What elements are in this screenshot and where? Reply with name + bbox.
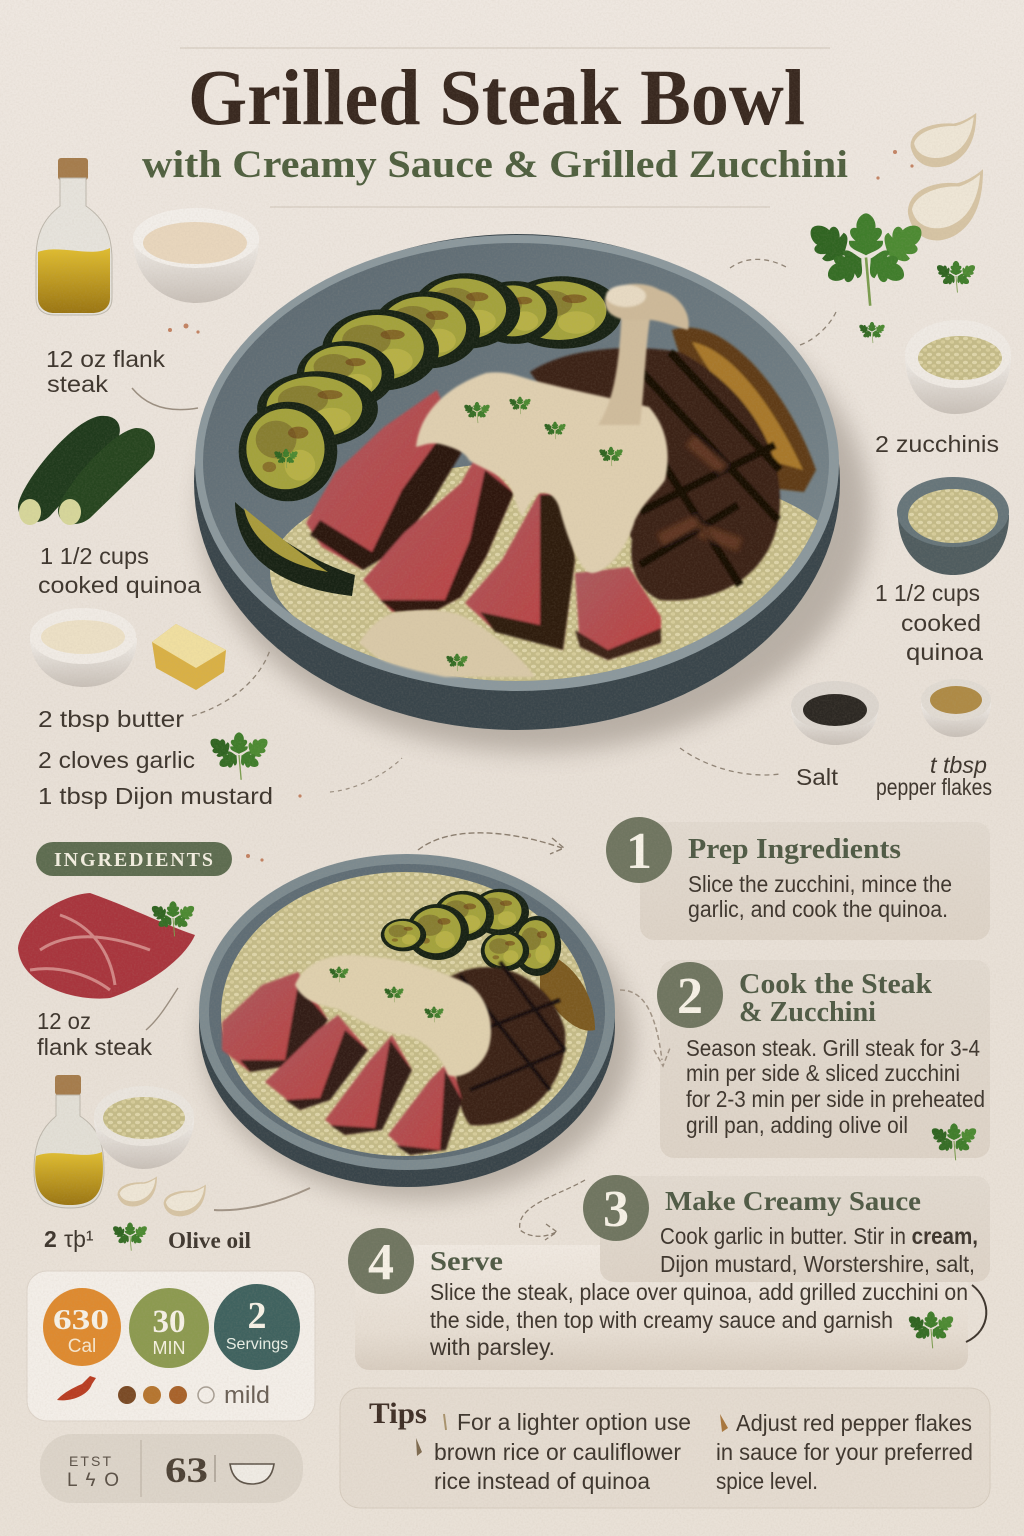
panel: lower info pill: 63 bbox=[165, 1450, 208, 1490]
label: olive oil: Olive oil bbox=[168, 1228, 251, 1253]
icon: cream bowl bbox=[30, 608, 137, 687]
label: flank steak: steak bbox=[47, 371, 109, 397]
panel: lower info pill: L ϟ O bbox=[67, 1470, 119, 1491]
panel: step 4: with parsley. bbox=[429, 1334, 555, 1360]
icon: olive oil bottle bbox=[36, 158, 112, 315]
parsley garnish bbox=[272, 397, 625, 671]
tip 2: Adjust red pepper flakes bbox=[736, 1410, 972, 1436]
lower bowl parsley bbox=[328, 966, 445, 1022]
icon: lower quinoa bowl bbox=[94, 1086, 194, 1169]
icon: quinoa bowl right bbox=[897, 477, 1009, 575]
label: quinoa right: quinoa bbox=[906, 639, 983, 665]
panel: step 2: Season steak. Grill steak for 3-4 bbox=[686, 1035, 980, 1061]
panel: step 1: garlic, and cook the quinoa. bbox=[688, 896, 948, 922]
icon: chili bbox=[57, 1376, 96, 1400]
icon: butter bbox=[152, 624, 226, 690]
lower bowl sauce bbox=[295, 955, 491, 1076]
panel: step 4 bbox=[348, 1228, 986, 1370]
label: flank steak lower: 12 oz bbox=[37, 1008, 91, 1034]
icon: parsley sprig bbox=[206, 732, 272, 780]
panel: tips: Tips bbox=[369, 1397, 427, 1430]
sliced steak bbox=[306, 390, 661, 660]
arrow: dashed to step one bbox=[418, 833, 564, 854]
icon: grain bowl top bbox=[905, 320, 1011, 414]
arrow: dashed to bowl bbox=[330, 758, 402, 792]
label: salt and pepper flakes: t tbsp bbox=[930, 752, 987, 778]
step number 1 bbox=[606, 817, 672, 883]
tip 1: rice instead of quinoa bbox=[434, 1468, 650, 1494]
icon: sprig near steak bbox=[148, 901, 198, 936]
label: salt and pepper flakes: pepper flakes bbox=[876, 774, 992, 800]
arrow: step 1 to step 2 bbox=[620, 990, 670, 1066]
arrow: step 3 to step 4 bbox=[520, 1180, 585, 1240]
tip 2: in sauce for your preferred bbox=[716, 1439, 973, 1465]
label: flank steak bbox=[46, 346, 166, 397]
lower bowl steak slices bbox=[222, 962, 565, 1155]
label: salt and pepper flakes: Salt bbox=[796, 764, 839, 790]
stat: servings: Servings bbox=[226, 1336, 288, 1353]
panel: step 2: for 2-3 min per side in preheated bbox=[686, 1086, 985, 1112]
label: olive oil: τþ¹ bbox=[64, 1226, 94, 1252]
panel: step 2: Cook the Steak bbox=[739, 968, 933, 1000]
panel: step 2: & Zucchini bbox=[739, 996, 876, 1028]
lower bowl zucchini bbox=[381, 889, 595, 1031]
arrow: dashed to butter bbox=[192, 650, 270, 716]
stat: minutes: 30 bbox=[152, 1304, 186, 1340]
label: butter garlic mustard: 2 tbsp butter bbox=[38, 706, 184, 732]
panel: step 4: Serve bbox=[430, 1246, 503, 1276]
zucchini slices bbox=[235, 273, 622, 596]
stat: servings: 2 bbox=[248, 1295, 266, 1337]
label: olive oil: 2 bbox=[44, 1226, 57, 1252]
label: quinoa left bbox=[38, 543, 201, 598]
panel: lower info pill: ETST bbox=[69, 1453, 111, 1469]
main grilled steak bowl bbox=[194, 234, 870, 752]
step number 3 bbox=[583, 1175, 649, 1241]
icon: parsley top right bbox=[801, 213, 978, 343]
label: quinoa left: 1 1/2 cups bbox=[40, 543, 149, 569]
step number 3: 3 bbox=[603, 1181, 629, 1238]
tip 2 bbox=[716, 1410, 973, 1494]
title: Grilled Steak Bowl bbox=[188, 55, 805, 142]
panel: step 4: the side, then top with creamy sauce and garnish bbox=[430, 1307, 893, 1333]
panel: step 3 bbox=[583, 1175, 990, 1282]
label: flank steak lower: flank steak bbox=[37, 1034, 153, 1060]
icon: spice bowl bbox=[921, 679, 991, 737]
label: zucchinis right: 2 zucchinis bbox=[875, 431, 999, 457]
panel: lower info pill bbox=[40, 1434, 303, 1503]
label: quinoa right bbox=[875, 580, 983, 665]
stat: calories: 630 bbox=[53, 1305, 109, 1336]
whole grilled steak bbox=[530, 328, 816, 600]
step number 4 bbox=[348, 1228, 414, 1294]
panel: step 4: Slice the steak, place over quinoa, add grilled zucchini on bbox=[430, 1279, 968, 1305]
stat: minutes: MIN bbox=[152, 1338, 186, 1358]
icon: sauce bowl bbox=[133, 208, 259, 303]
arrow: steak to lower bowl bbox=[146, 988, 178, 1030]
spice level dots bbox=[118, 1386, 214, 1404]
stat: calories: Cal bbox=[68, 1336, 96, 1357]
panel: step 3: Make Creamy Sauce bbox=[665, 1186, 921, 1216]
label: butter garlic mustard bbox=[38, 706, 273, 809]
subtitle: with Creamy Sauce & Grilled Zucchini bbox=[142, 143, 848, 186]
panel: step 3: Dijon mustard, Worstershire, salt, bbox=[660, 1251, 975, 1277]
icon: zucchinis bbox=[18, 416, 155, 525]
panel: nutrition stats bbox=[27, 1271, 315, 1421]
panel: step 3: Cook garlic in butter. Stir in cream, bbox=[660, 1223, 978, 1249]
label: quinoa right: cooked bbox=[901, 610, 981, 636]
icon: pepper bowl bbox=[791, 681, 879, 745]
spice specks bbox=[168, 150, 914, 862]
spice label: mild bbox=[224, 1382, 270, 1409]
label: quinoa left: cooked quinoa bbox=[38, 572, 201, 598]
label: flank steak lower bbox=[37, 1008, 153, 1060]
label: butter garlic mustard: 2 cloves garlic bbox=[38, 747, 195, 773]
label: butter garlic mustard: 1 tbsp Dijon mustard bbox=[38, 783, 273, 809]
label: quinoa right: 1 1/2 cups bbox=[875, 580, 980, 606]
ingredients heading pill: INGREDIENTS bbox=[54, 849, 213, 871]
panel: step 1: Prep Ingredients bbox=[688, 834, 901, 865]
panel: step 1 bbox=[606, 817, 990, 940]
icon: garlic cloves bbox=[908, 113, 983, 240]
step number 2: 2 bbox=[677, 968, 703, 1025]
tip 1: For a lighter option use bbox=[457, 1409, 691, 1435]
arrow: dashed to salt bbox=[680, 748, 780, 775]
panel: step 2: min per side & sliced zucchini bbox=[686, 1060, 960, 1086]
panel: step 2: grill pan, adding olive oil bbox=[686, 1112, 908, 1138]
ingredients heading pill bbox=[36, 842, 232, 876]
lower steak bowl bbox=[199, 854, 633, 1200]
icon: raw flank steak bbox=[18, 893, 195, 999]
tip 1: brown rice or cauliflower bbox=[434, 1439, 681, 1465]
step number 2 bbox=[657, 962, 723, 1028]
arrow: to step four bbox=[214, 1188, 310, 1210]
label: olive oil bbox=[44, 1223, 251, 1253]
icon: lower oil bottle bbox=[34, 1075, 104, 1208]
panel: step 1: Slice the zucchini, mince the bbox=[688, 871, 952, 897]
stat: calories bbox=[43, 1288, 121, 1366]
panel: tips bbox=[340, 1388, 990, 1508]
step number 4: 4 bbox=[368, 1234, 394, 1291]
label: flank steak: 12 oz flank bbox=[46, 346, 166, 372]
step number 1: 1 bbox=[626, 823, 652, 880]
label: salt and pepper flakes bbox=[796, 752, 992, 800]
icon: lower garlic bbox=[118, 1176, 206, 1216]
arrow: parsley to bowl bbox=[730, 259, 836, 345]
arrow: steak to bowl bbox=[132, 388, 198, 410]
panel: step 2 bbox=[657, 960, 990, 1160]
creamy sauce bbox=[359, 284, 689, 677]
stat: minutes bbox=[129, 1288, 209, 1368]
stat: servings bbox=[214, 1284, 300, 1370]
tip 2: spice level. bbox=[716, 1468, 818, 1494]
tip 1 bbox=[416, 1409, 691, 1494]
